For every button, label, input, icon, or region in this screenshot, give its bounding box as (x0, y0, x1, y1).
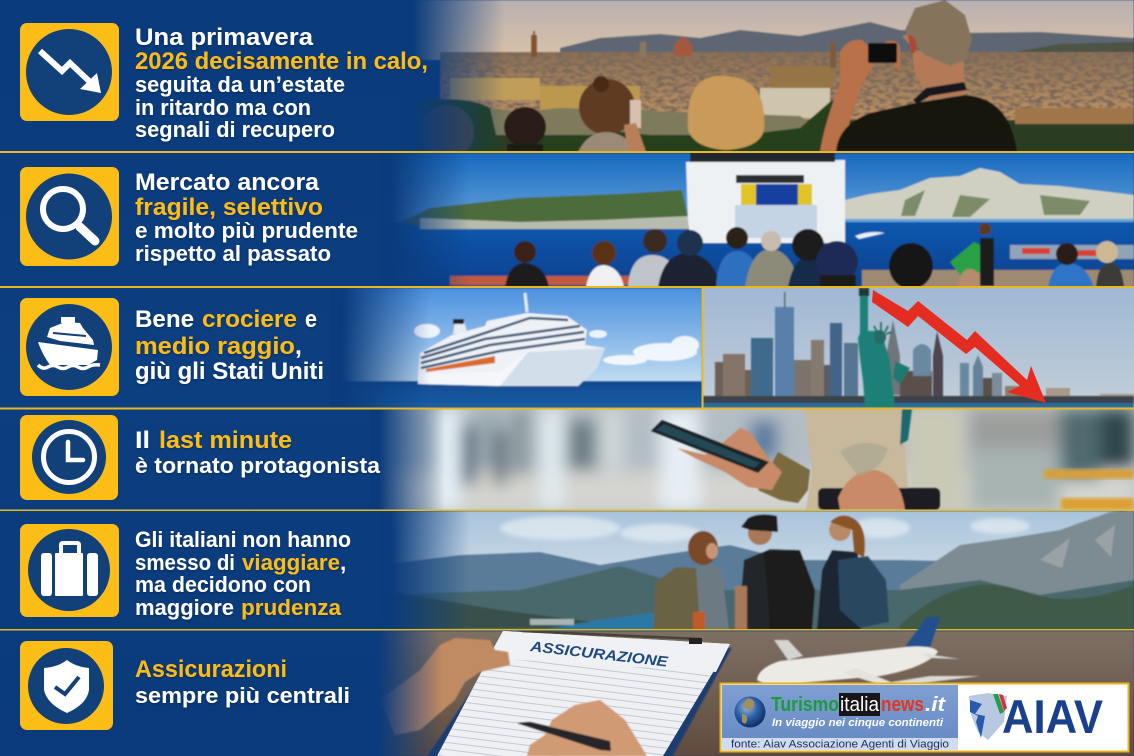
text: italiani (135, 527, 351, 620)
arrow: red falling trend (872, 290, 1046, 403)
text: primavera: seguita da un’estate (135, 72, 345, 97)
panel: mercato fragile (20, 153, 1134, 289)
text: italiani: prudenza (241, 595, 341, 620)
clipboard heading: ASSICURAZIONE (528, 639, 670, 671)
text: italiani: Gli italiani non hanno (135, 527, 351, 552)
Turismo Italia News panel: fonte: Aiav Associazione Agenti di Viaggio (731, 738, 949, 750)
icon: magnifying glass (20, 167, 119, 266)
text: last minute: è tornato protagonista (135, 453, 380, 478)
Turismo Italia News panel: news (881, 694, 924, 716)
text: crociere: medio raggio (135, 333, 295, 360)
photo: ferry and tourists at the sea (380, 153, 1134, 289)
text: assicurazioni (135, 656, 350, 708)
text: assicurazioni: sempre più centrali (135, 683, 350, 708)
text: mercato: fragile, selettivo (135, 194, 323, 221)
text: primavera: segnali di recupero (135, 117, 335, 142)
icon: shield with check (20, 641, 113, 730)
icon: clock (20, 415, 118, 500)
text: primavera: 2026 decisamente in calo, (135, 48, 428, 75)
text: primavera: Una primavera (135, 24, 313, 51)
text: italiani: maggiore (135, 595, 234, 620)
text: crociere: e (305, 306, 317, 333)
text: assicurazioni: Assicurazioni (135, 656, 287, 683)
panel: primavera in calo (20, 0, 1134, 159)
model airplane (757, 617, 980, 688)
text: crociere: , (295, 333, 302, 360)
clipboard paper (437, 631, 730, 756)
text: mercato: Mercato ancora (135, 169, 319, 196)
Turismo Italia News panel: italia (840, 694, 880, 716)
text: crociere: Bene (135, 306, 194, 333)
text: italiani: viaggiare (242, 550, 340, 575)
panel: crociere e Stati Uniti (20, 288, 1134, 408)
logo box (720, 684, 1128, 752)
icon: trend arrow down (20, 23, 119, 121)
photo: cruise ship (330, 288, 702, 408)
text: mercato (135, 169, 358, 266)
Turismo Italia News panel: .it (925, 694, 946, 716)
text: crociere: crociere (202, 306, 297, 333)
text: mercato: e molto più prudente (135, 218, 358, 243)
text: primavera (135, 24, 428, 142)
photo: Firenze panorama with tourists (400, 0, 1134, 159)
dividers (0, 151, 1134, 630)
text: last minute: last minute (159, 427, 292, 454)
text: primavera: in ritardo ma con (135, 95, 311, 120)
photo: three hikers facing mountains (380, 510, 1134, 630)
icon: suitcase (20, 524, 119, 617)
text: mercato: rispetto al passato (135, 241, 331, 266)
AIAV logo: AIAV (1002, 690, 1104, 743)
text: italiani: smesso di (135, 550, 235, 575)
Turismo Italia News panel: Turismo (771, 694, 839, 716)
text: crociere: giù gli Stati Uniti (135, 358, 324, 385)
text: italiani: ma decidono con (135, 572, 311, 597)
icon: cruise ship (20, 298, 119, 396)
photo: New York skyline with red falling arrow (703, 288, 1134, 408)
panel: assicurazioni (20, 617, 1134, 756)
photo: traveller with smartphone in airport (370, 409, 1134, 512)
text: italiani: , (340, 550, 346, 575)
panel: italiani in viaggio (20, 510, 1134, 630)
text: crociere (135, 306, 324, 385)
Turismo Italia News panel: In viaggio nei cinque continenti (772, 717, 944, 729)
text: last minute (135, 427, 380, 478)
photo: insurance clipboard and model plane (370, 631, 1134, 756)
Turismo Italia News panel (722, 685, 958, 750)
panel: last minute (20, 409, 1134, 512)
text: last minute: Il (135, 427, 150, 454)
